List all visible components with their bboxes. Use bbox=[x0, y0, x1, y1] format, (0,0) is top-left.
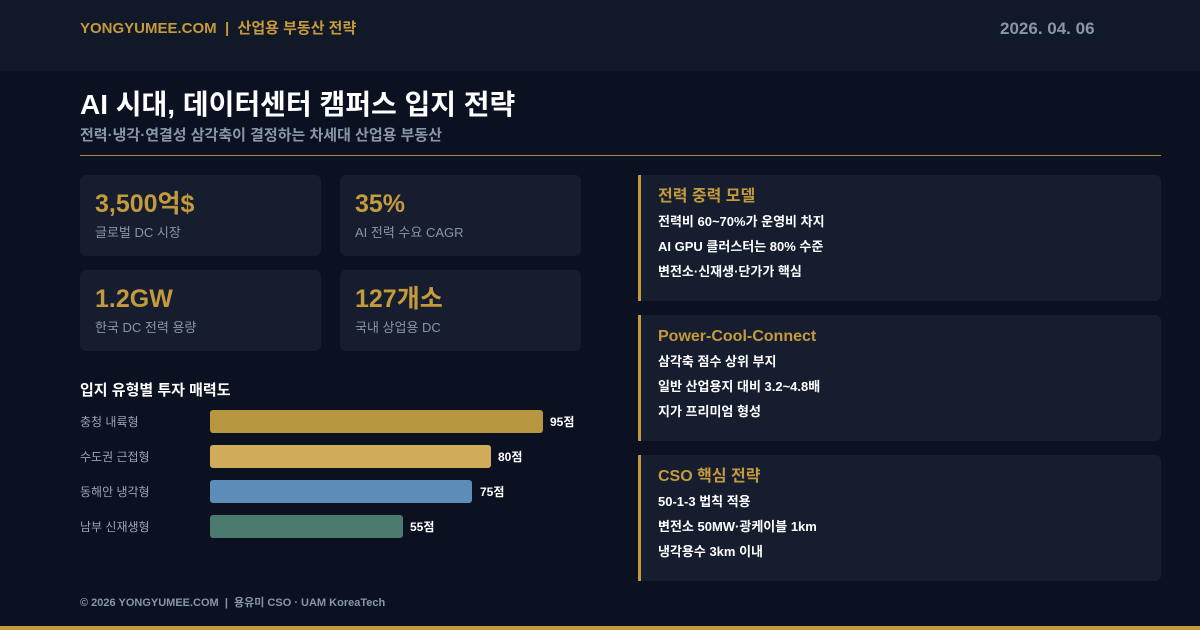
panel: power: 전력비 60~70%가 운영비 차지 bbox=[658, 214, 825, 229]
bar chart bbox=[80, 410, 574, 538]
panel: power-cool-connect: Power-Cool-Connect bbox=[658, 328, 816, 345]
bar chart: 75점 bbox=[480, 485, 504, 499]
bar chart: 남부 신재생형 bbox=[80, 520, 150, 534]
subtitle: 전력·냉각·연결성 삼각축이 결정하는 차세대 산업용 부동산 bbox=[80, 127, 442, 144]
chart title: 입지 유형별 투자 매력도 bbox=[80, 382, 231, 399]
date: 2026. 04. 06 bbox=[1000, 19, 1095, 38]
stat card: CAGR: AI 전력 수요 CAGR bbox=[355, 225, 464, 240]
stat card: CAGR: 35% bbox=[355, 190, 405, 218]
stat card: capacity: 한국 DC 전력 용량 bbox=[95, 320, 196, 335]
stat card: market: 글로벌 DC 시장 bbox=[95, 225, 181, 240]
stat card: market bbox=[80, 175, 321, 256]
panel: CSO strategy: 냉각용수 3km 이내 bbox=[658, 544, 763, 559]
panel: power-cool-connect: 삼각축 점수 상위 부지 bbox=[658, 354, 776, 369]
panel: CSO strategy: 50-1-3 법칙 적용 bbox=[658, 494, 751, 509]
header bar bbox=[0, 0, 1200, 71]
bar chart: 80점 bbox=[498, 450, 522, 464]
footer: © 2026 YONGYUMEE.COM | 용유미 CSO · UAM KoreaTech bbox=[80, 597, 385, 609]
bar chart: 55점 bbox=[410, 520, 434, 534]
stat card: count: 127개소 bbox=[355, 285, 443, 313]
stat card: CAGR bbox=[340, 175, 581, 256]
panel: CSO strategy: 변전소 50MW·광케이블 1km bbox=[658, 519, 817, 534]
stat card: capacity: 1.2GW bbox=[95, 285, 173, 313]
bar chart: 충청 내륙형 bbox=[80, 415, 139, 429]
panel: CSO strategy bbox=[638, 455, 1161, 581]
brand: YONGYUMEE.COM | 산업용 부동산 전략 bbox=[80, 20, 356, 37]
panel: power bbox=[638, 175, 1161, 301]
panel: power-cool-connect bbox=[638, 315, 1161, 441]
stat card: capacity bbox=[80, 270, 321, 351]
title: AI 시대, 데이터센터 캠퍼스 입지 전략 bbox=[80, 89, 515, 120]
bar chart: 수도권 근접형 bbox=[80, 450, 150, 464]
stat card: count bbox=[340, 270, 581, 351]
bar chart: 동해안 냉각형 bbox=[80, 485, 150, 499]
panel: CSO strategy: CSO 핵심 전략 bbox=[658, 468, 760, 485]
panel: power: 전력 중력 모델 bbox=[658, 188, 755, 205]
panel: power: 변전소·신재생·단가가 핵심 bbox=[658, 264, 802, 279]
panel: power: AI GPU 클러스터는 80% 수준 bbox=[658, 239, 823, 254]
stat card: count: 국내 상업용 DC bbox=[355, 320, 441, 335]
panel: power-cool-connect: 지가 프리미엄 형성 bbox=[658, 404, 761, 419]
stat card: market: 3,500억$ bbox=[95, 190, 194, 218]
bar chart: 95점 bbox=[550, 415, 574, 429]
panel: power-cool-connect: 일반 산업용지 대비 3.2~4.8배 bbox=[658, 379, 820, 394]
